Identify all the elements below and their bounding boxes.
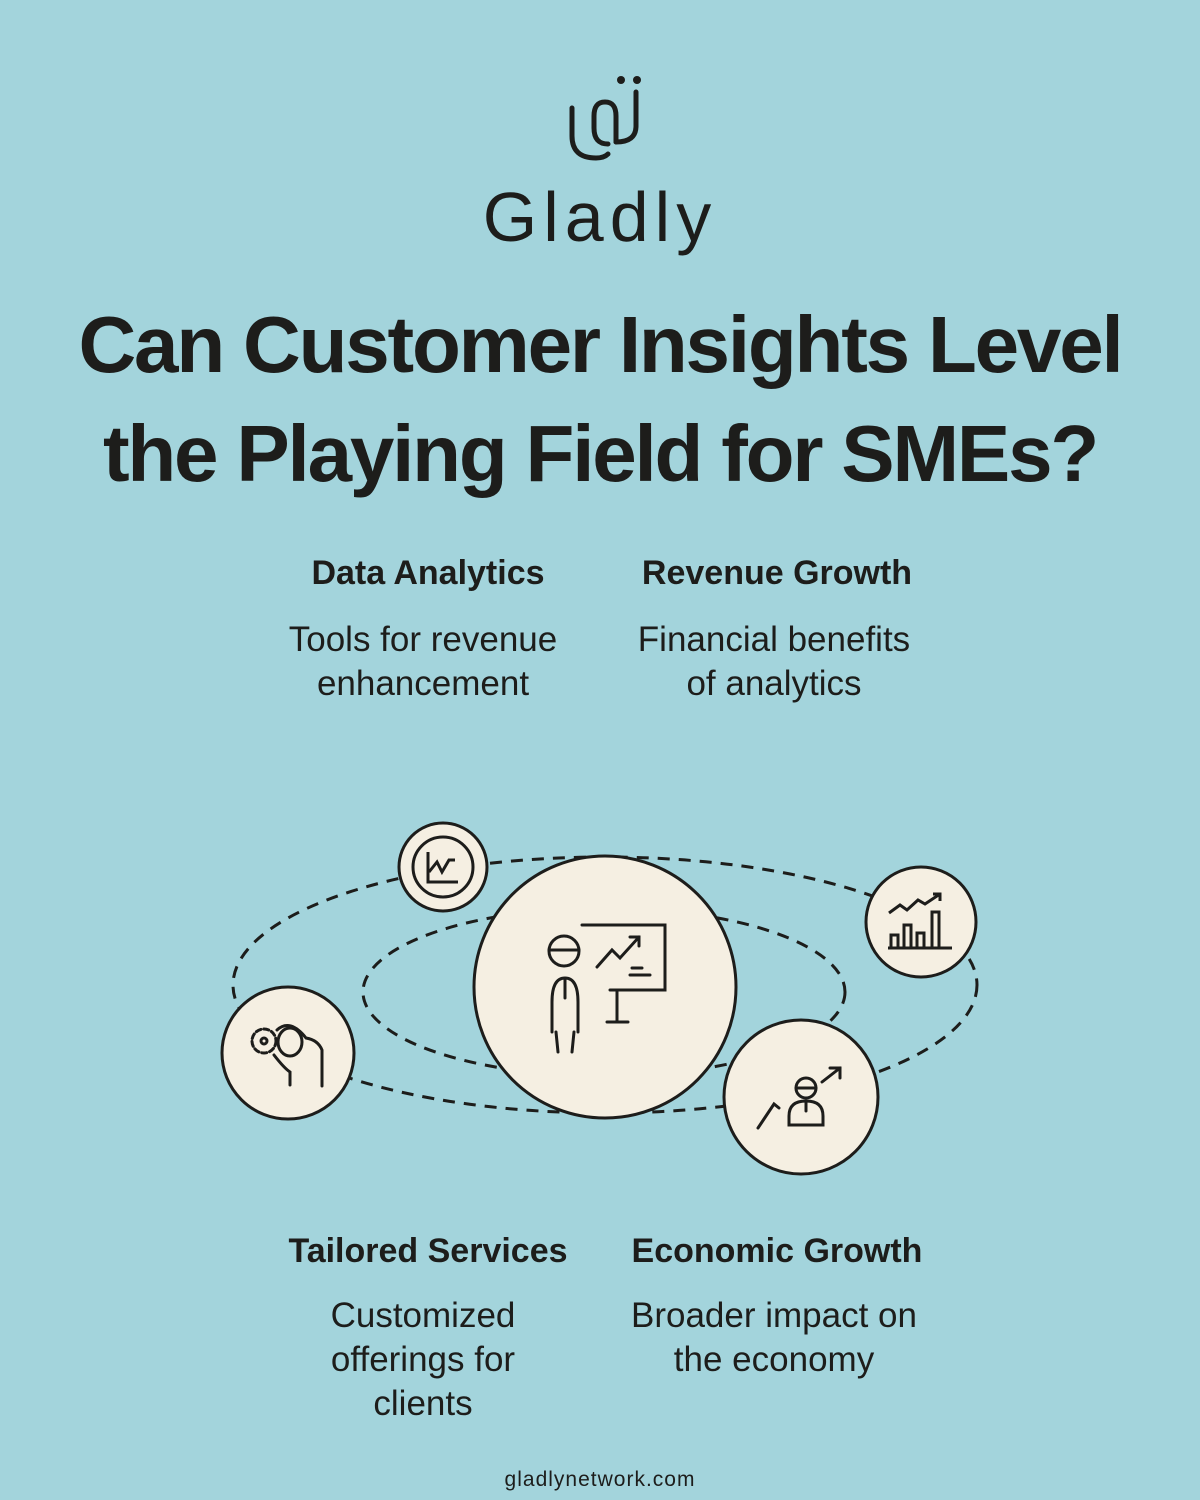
center circle — [474, 856, 736, 1118]
icon: person growth — [758, 1068, 840, 1128]
footer: gladlynetwork.com — [505, 1468, 695, 1491]
diagram — [220, 822, 978, 1176]
block: tailored services — [288, 1232, 568, 1423]
logo icon — [570, 76, 641, 160]
heading: Tailored Services — [288, 1232, 568, 1270]
icon circles — [399, 823, 487, 911]
text: Tools for revenue enhancement — [289, 620, 557, 703]
icon: presenter — [549, 925, 665, 1052]
text — [331, 1296, 515, 1423]
icon: bar chart — [888, 894, 952, 948]
text: Financial benefits of analytics — [638, 620, 910, 703]
heading: Economic Growth — [632, 1232, 922, 1270]
icon: chart badge — [413, 837, 473, 897]
block: revenue growth — [638, 554, 912, 703]
text: Customized — [331, 1296, 515, 1335]
heading: Revenue Growth — [642, 554, 912, 592]
brand name: Gladly — [483, 178, 717, 256]
text: offerings for — [331, 1340, 515, 1379]
text: Broader impact on the economy — [631, 1296, 917, 1379]
title — [78, 300, 1122, 498]
heading: Data Analytics — [311, 554, 545, 592]
block: data analytics — [289, 554, 557, 703]
block: economic growth — [631, 1232, 922, 1379]
title: Can Customer Insights Level — [78, 300, 1122, 389]
icon: hand gear — [252, 1026, 322, 1086]
title: the Playing Field for SMEs? — [103, 409, 1097, 498]
text: clients — [373, 1384, 473, 1423]
